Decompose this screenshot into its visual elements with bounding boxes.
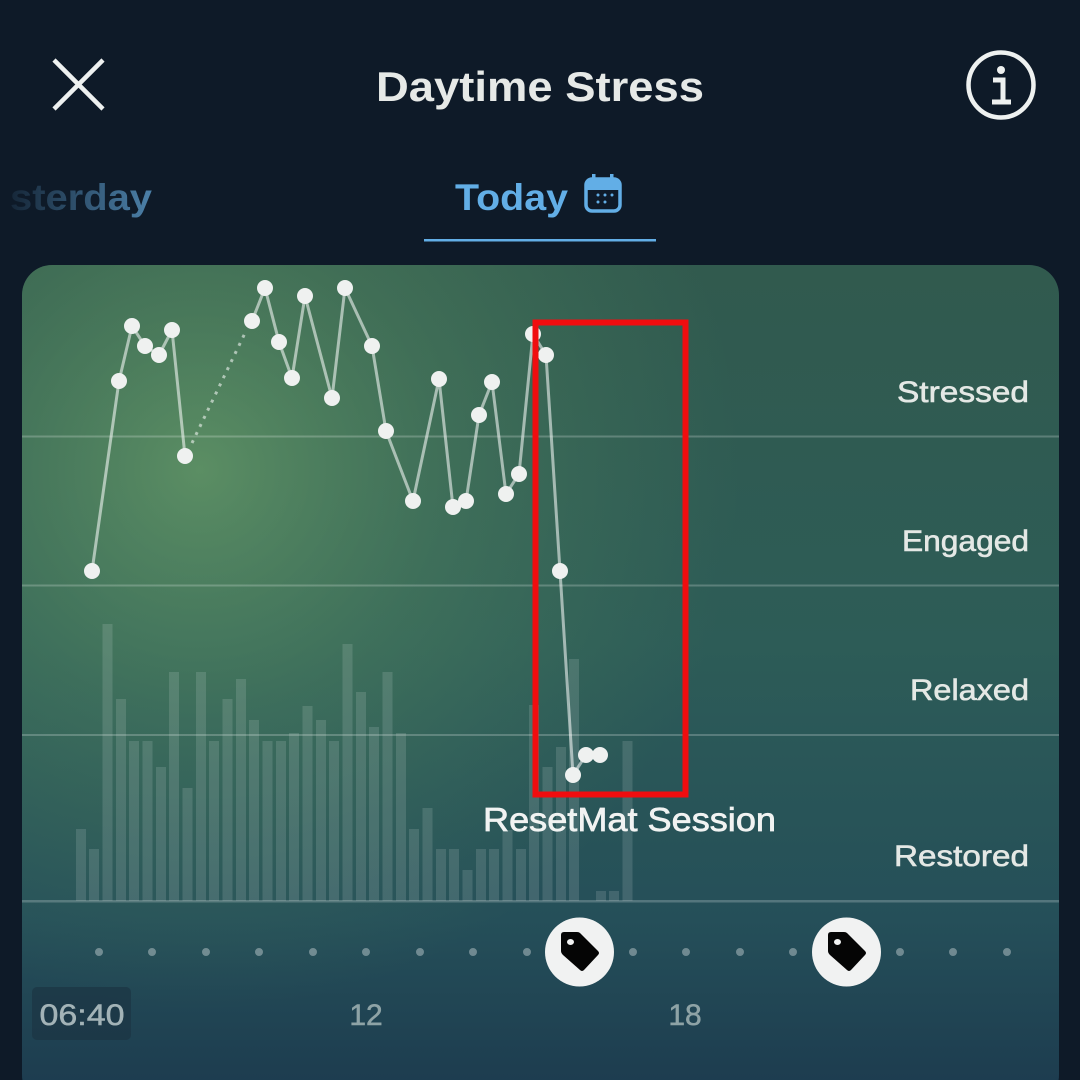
time label: start time: 06:40 <box>40 999 124 1032</box>
tab: today: Today <box>455 177 568 218</box>
panel: stress chart card <box>22 265 1059 1080</box>
icon: tag button 1 <box>545 918 614 986</box>
tab: yesterday: sterday <box>10 177 152 218</box>
icon: calendar <box>586 174 620 211</box>
y-axis labels <box>894 376 1029 873</box>
bar chart: stress levels <box>76 624 632 901</box>
icon: tag button 2 <box>812 918 881 986</box>
time label: 12: 12 <box>349 999 383 1032</box>
callout: red highlight box <box>536 322 686 794</box>
y-axis labels: Relaxed <box>910 674 1029 707</box>
tab: today <box>455 174 620 218</box>
y-axis labels: Stressed <box>897 376 1029 409</box>
icon: info <box>968 52 1034 118</box>
y-axis labels: Restored <box>894 840 1029 873</box>
tab underline <box>424 239 656 242</box>
y-axis labels: Engaged <box>902 525 1029 558</box>
timeline dots <box>99 948 1007 956</box>
title: Daytime Stress <box>376 63 704 110</box>
time label: start time <box>32 987 131 1040</box>
icon: close <box>54 60 103 109</box>
line chart: daytime stress <box>92 288 600 775</box>
callout label: ResetMat Session: ResetMat Session <box>483 801 776 838</box>
time label: 18: 18 <box>668 999 702 1032</box>
